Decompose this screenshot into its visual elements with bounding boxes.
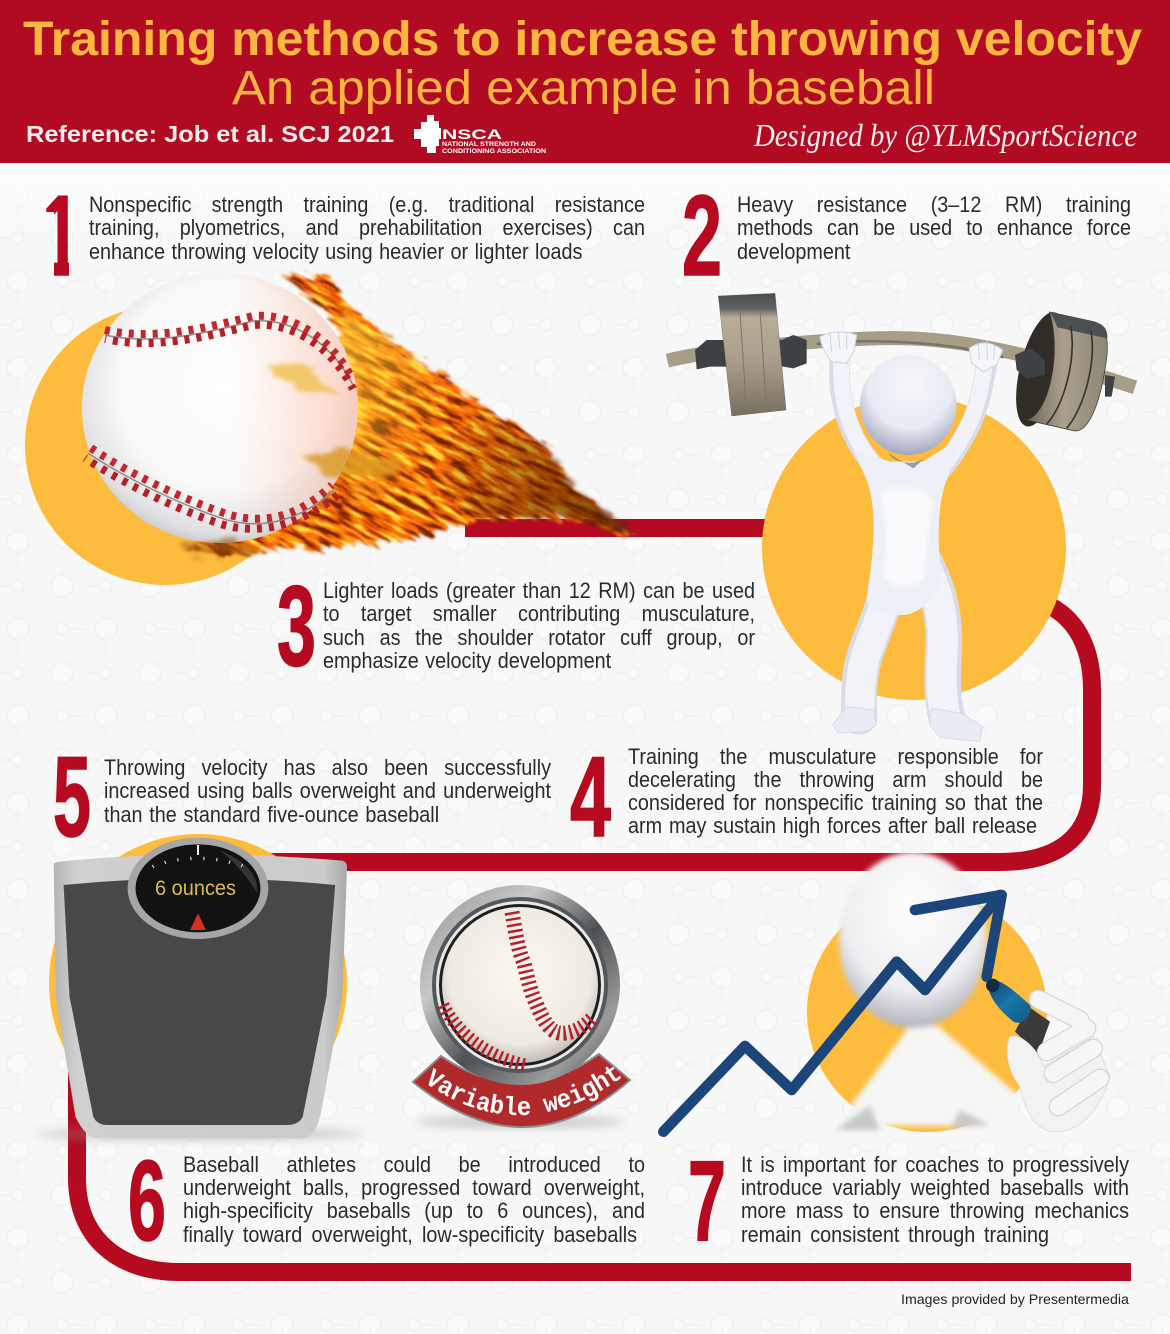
- text block 2: Heavy resistance (3–12 RM) training: [737, 192, 1131, 217]
- text block 6: finally toward overweight, low-specificity baseballs: [183, 1222, 637, 1247]
- baseball: [82, 273, 358, 543]
- text block 6: high-specificity baseballs (up to 6 ounces), and: [183, 1198, 645, 1223]
- step numbers: 4: [570, 734, 611, 861]
- text block 7: It is important for coaches to progressively: [741, 1152, 1129, 1177]
- text block 2: methods can be used to enhance force: [737, 215, 1131, 240]
- text block 5: than the standard five-ounce baseball: [104, 802, 439, 827]
- panel: weightlifter illustration: [667, 293, 1135, 742]
- right plate: [1006, 307, 1075, 431]
- panel: bathroom scale illustration: [35, 834, 365, 1139]
- top seam: [105, 316, 353, 389]
- lifter head: [860, 355, 957, 455]
- header banner: [0, 0, 1170, 163]
- text block 4: Training the musculature responsible for: [628, 744, 1043, 769]
- reference: Reference: Job et al. SCJ 2021: [26, 121, 394, 147]
- banner: [413, 1054, 630, 1127]
- hand with marker: [986, 979, 1110, 1132]
- NSCA logo: NATIONAL STRENGTH AND: [442, 141, 536, 148]
- lifter limbs and torso: [839, 355, 987, 717]
- yellow circle behind lifter: [762, 396, 1066, 700]
- blurred figure: [835, 852, 1020, 1130]
- flame licks on baseball: [178, 362, 402, 555]
- NSCA logo: CONDITIONING ASSOCIATION: [442, 148, 546, 155]
- text block 4: [628, 744, 1043, 838]
- text block 3: Lighter loads (greater than 12 RM) can be used: [323, 578, 755, 603]
- red connector path: [77, 528, 1131, 1272]
- scale reading: 6 ounces: [155, 877, 236, 900]
- panel: progress chart illustration: [663, 852, 1110, 1132]
- text block 7: more mass to ensure throwing mechanics: [741, 1198, 1129, 1223]
- designer credit: Designed by @YLMSportScience: [753, 117, 1137, 153]
- hands: [820, 332, 1003, 372]
- yellow circle behind scale: [49, 834, 347, 1132]
- step numbers: 2: [682, 173, 722, 300]
- dial pointer: [190, 913, 206, 930]
- bottom seam: [85, 448, 338, 529]
- flames: [64, 83, 753, 741]
- step numbers: 5: [53, 734, 91, 861]
- yellow circle behind figure: [807, 892, 1047, 1132]
- rising arrow: [663, 895, 1002, 1132]
- step numbers: [46, 194, 724, 1242]
- scale frame: [54, 854, 347, 1138]
- scale platform: [64, 878, 335, 1125]
- text block 1: Nonspecific strength training (e.g. traditional resistance: [89, 192, 645, 217]
- image credit: Images provided by Presentermedia: [901, 1292, 1129, 1308]
- title: Training methods to increase throwing velocity: [23, 13, 1142, 66]
- chrome ring: [420, 885, 620, 1085]
- step numbers: 6: [128, 1138, 166, 1265]
- yellow circle behind baseball: [25, 305, 305, 585]
- text block 4: considered for nonspecific training so that the: [628, 790, 1043, 815]
- NSCA logo: NSCA: [442, 126, 502, 142]
- text block 5: Throwing velocity has also been successfully: [104, 755, 551, 780]
- text block 5: increased using balls overweight and underweight: [104, 778, 551, 803]
- banner label: Variable weight: [428, 1066, 621, 1116]
- text block 1: [89, 192, 645, 264]
- panel: variable weight baseball badge: [412, 885, 632, 1132]
- ball in ring: [442, 907, 598, 1065]
- text block 7: remain consistent through training: [741, 1222, 1049, 1247]
- text block 6: underweight balls, progressed toward overweight,: [183, 1175, 645, 1200]
- text block 3: emphasize velocity development: [323, 648, 611, 673]
- text block 6: [183, 1152, 645, 1247]
- text block 4: arm may sustain high forces after ball release: [628, 813, 1037, 838]
- step numbers: 7: [688, 1138, 726, 1265]
- subtitle: An applied example in baseball: [232, 62, 935, 115]
- text block 3: to target smaller contributing musculature,: [323, 601, 755, 626]
- text block 3: [323, 578, 755, 673]
- text block 1: training, plyometrics, and prehabilitation exercises) can: [89, 215, 645, 240]
- feet: [833, 707, 876, 733]
- NSCA logo: [414, 115, 546, 155]
- text block 1: enhance throwing velocity using heavier or lighter loads: [89, 239, 582, 264]
- step numbers: 3: [277, 563, 316, 690]
- panel: fireball illustration: [25, 83, 753, 741]
- text block 5: [104, 755, 551, 827]
- text block 3: such as the shoulder rotator cuff group, or: [323, 625, 755, 650]
- text block 4: decelerating the throwing arm should be: [628, 767, 1043, 792]
- badge shadow: [415, 1117, 625, 1127]
- text block 2: development: [737, 239, 850, 264]
- barbell: [667, 293, 1135, 431]
- step numbers: 1: [42, 173, 80, 300]
- text block 2: [737, 192, 1131, 264]
- scale dial: [128, 838, 268, 939]
- text block 7: [741, 1152, 1129, 1247]
- text block 6: Baseball athletes could be introduced to: [183, 1152, 645, 1177]
- text block 7: introduce variably weighted baseballs with: [741, 1175, 1129, 1200]
- scale shadow: [35, 1129, 365, 1139]
